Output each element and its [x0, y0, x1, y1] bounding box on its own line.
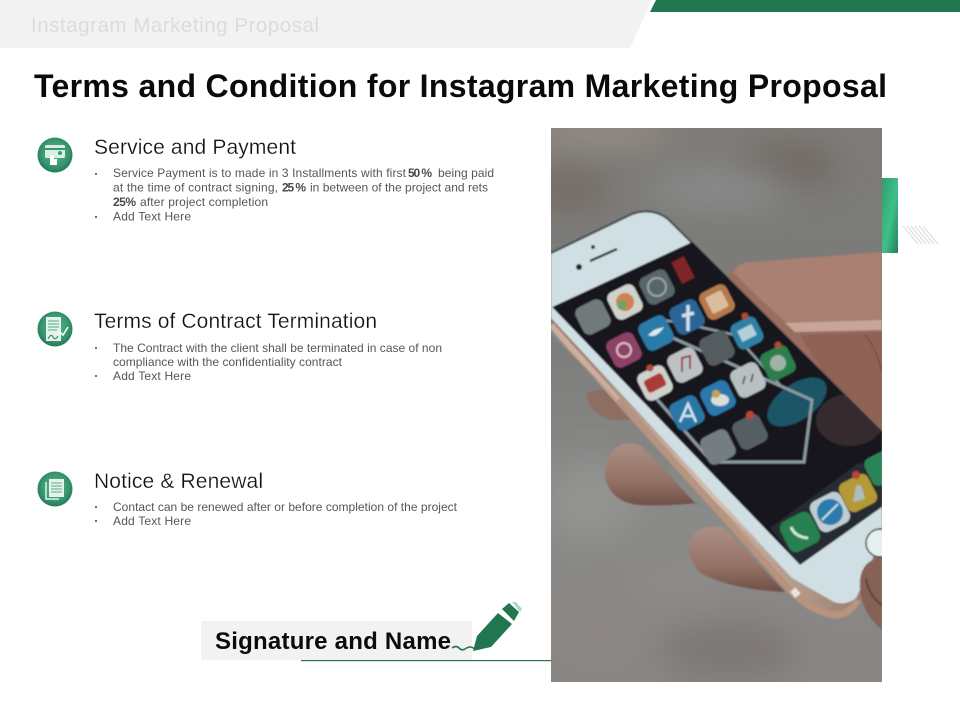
bullet list: Add Text Here — [113, 514, 191, 528]
bullet list: The Contract with the client shall be terminated in case of non — [113, 341, 442, 355]
bullet list: 50 % — [408, 166, 432, 180]
heading: Notice & Renewal — [94, 470, 263, 493]
heading: Service and Payment — [94, 136, 296, 159]
blurred background — [530, 124, 882, 682]
section: terms of contract termination — [38, 310, 442, 383]
hatch decoration — [903, 226, 938, 244]
header banner: Instagram Marketing Proposal — [31, 14, 319, 37]
screen — [552, 242, 902, 565]
fingers — [587, 385, 785, 592]
photo: hand holding phone — [551, 128, 882, 682]
bullet list: Contact can be renewed after or before completion of the project — [113, 500, 458, 514]
home button — [864, 527, 882, 558]
header banner — [0, 0, 960, 48]
app icons — [573, 256, 902, 555]
bullet list: being paid — [438, 166, 494, 180]
hand — [728, 252, 882, 430]
bullet list: at the time of contract signing, — [113, 180, 278, 194]
signature label: Signature and Name — [215, 628, 451, 655]
bullet list: compliance with the confidentiality contract — [113, 355, 343, 369]
icon: pen with squiggle — [452, 602, 522, 651]
bullet list — [95, 500, 458, 528]
bullet list: Add Text Here — [113, 210, 191, 224]
section: service and payment — [38, 136, 494, 224]
bullet list: in between of the project and rets — [310, 180, 488, 194]
accent bar — [882, 178, 898, 253]
thumb — [860, 557, 882, 630]
title: Terms and Condition for Instagram Marketing Proposal — [34, 68, 887, 104]
icon: documents — [38, 472, 72, 506]
bullet list — [95, 166, 494, 224]
signature block — [201, 602, 551, 661]
bullet list: after project completion — [140, 195, 268, 209]
icon: signed document — [38, 312, 72, 346]
bullet list: Add Text Here — [113, 369, 191, 383]
bullet list — [95, 341, 442, 383]
icon: payment card — [38, 138, 72, 172]
phone body — [551, 211, 882, 615]
section: notice and renewal — [38, 470, 458, 528]
bullet list: 25% — [113, 195, 136, 209]
heading: Terms of Contract Termination — [94, 310, 377, 333]
bullet list: 25 % — [282, 180, 306, 194]
bullet list: Service Payment is to made in 3 Installments with first — [113, 166, 407, 180]
